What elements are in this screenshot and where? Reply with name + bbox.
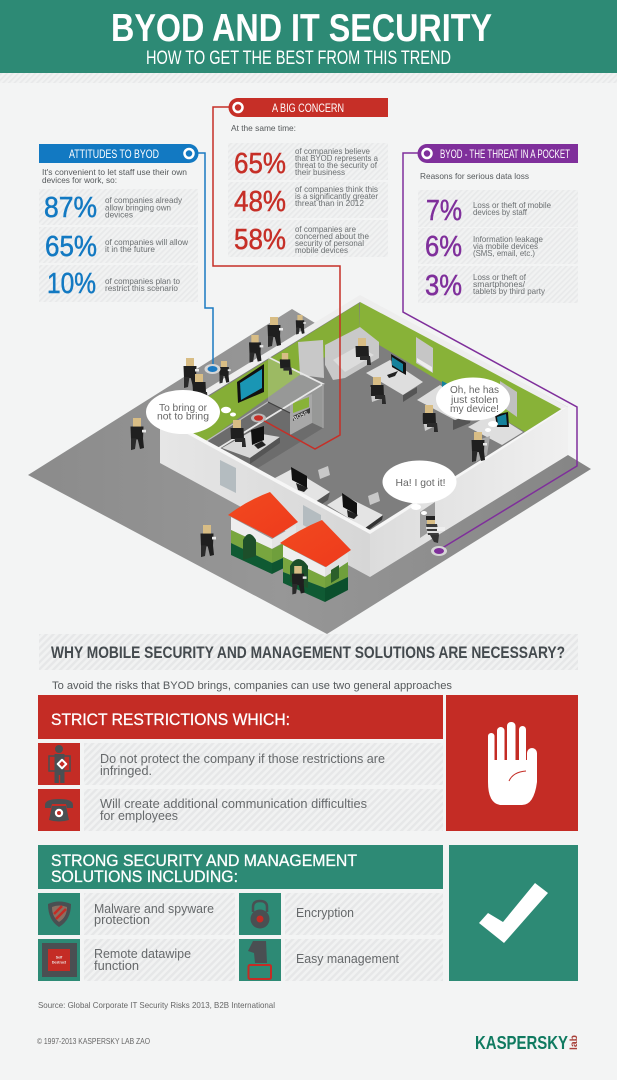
stat 48%: threat than in 2012 bbox=[295, 198, 364, 208]
speech bubble: got it: Ha! I got it! bbox=[396, 477, 446, 489]
stat 6% bbox=[418, 228, 578, 264]
solution: remote datawipe bbox=[38, 939, 235, 981]
stat 58%: concerned about the bbox=[295, 231, 369, 241]
restriction row 1: infringed. bbox=[100, 764, 152, 778]
icon: x-ray person bbox=[49, 745, 70, 783]
connector line: red bbox=[213, 107, 340, 449]
stat 3%: 3% bbox=[425, 270, 462, 302]
green back walls bbox=[187, 295, 568, 442]
icon: hand on tablet bbox=[248, 941, 271, 979]
red panel heading: A BIG CONCERN bbox=[272, 101, 344, 115]
wall TV screen bbox=[237, 364, 264, 403]
speech bubble: stolen device: just stolen bbox=[450, 394, 498, 406]
stat 7% bbox=[418, 190, 578, 227]
stat 6%: via mobile devices bbox=[473, 241, 538, 251]
office windows bbox=[416, 337, 517, 417]
stat 65%: that BYOD represents a bbox=[295, 153, 378, 163]
stat 58%: mobile devices bbox=[295, 245, 348, 255]
stat 10%: of companies plan to bbox=[105, 276, 180, 286]
stat 58% bbox=[228, 220, 388, 257]
stat 87% bbox=[39, 189, 198, 225]
stat 58%: 58% bbox=[234, 224, 286, 256]
icon: raised hand bbox=[488, 722, 537, 805]
stat 65%: it in the future bbox=[105, 244, 155, 254]
solution: remote datawipe: function bbox=[94, 959, 139, 973]
restrictions heading bbox=[38, 695, 443, 739]
office interior floor bbox=[160, 297, 568, 533]
purple panel intro: Reasons for serious data loss bbox=[420, 171, 529, 181]
icon: padlock bbox=[250, 901, 270, 928]
panel: attitudes to BYOD bbox=[39, 144, 198, 302]
solution: malware protection: protection bbox=[94, 913, 150, 927]
stat 87%: 87% bbox=[44, 192, 97, 224]
solution: encryption: Encryption bbox=[296, 906, 354, 920]
solution: malware protection: Malware and spyware bbox=[94, 902, 214, 916]
speech bubble: stolen device bbox=[436, 378, 510, 432]
blue panel heading: ATTITUDES TO BYOD bbox=[69, 147, 159, 161]
stat 6%: 6% bbox=[425, 231, 462, 263]
stat 6%: (SMS, email, etc.) bbox=[473, 248, 535, 258]
stat 87%: devices bbox=[105, 210, 133, 220]
stat 65%: their business bbox=[295, 167, 345, 177]
red panel intro: At the same time: bbox=[231, 123, 296, 133]
panel: threat in a pocket bbox=[418, 144, 578, 303]
stat 10% bbox=[39, 265, 198, 302]
icon: self destruct bbox=[42, 943, 77, 977]
blue panel intro: devices for work, so: bbox=[42, 175, 117, 185]
blue panel heading bbox=[39, 144, 198, 163]
stat 6%: Information leakage bbox=[473, 234, 543, 244]
solutions heading: STRONG SECURITY AND MANAGEMENT bbox=[51, 851, 357, 870]
stat 65%: threat to the security of bbox=[295, 160, 378, 170]
stat 3%: smartphones/ bbox=[473, 279, 526, 289]
stat 65%: 65% bbox=[234, 148, 286, 180]
subtitle: HOW TO GET THE BEST FROM THIS TREND bbox=[146, 47, 451, 69]
header banner bbox=[0, 0, 617, 83]
restrictions heading: STRICT RESTRICTIONS WHICH: bbox=[51, 710, 290, 729]
blue panel intro bbox=[42, 167, 187, 185]
isometric office scene bbox=[28, 295, 591, 634]
restriction row 2 bbox=[38, 789, 443, 831]
stat 7%: devices by staff bbox=[473, 207, 528, 217]
solution: remote datawipe: Remote datawipe bbox=[94, 947, 191, 961]
red panel heading bbox=[228, 98, 388, 117]
stat 3%: tablets by third party bbox=[473, 286, 546, 296]
people bbox=[130, 315, 487, 594]
stat 65%: 65% bbox=[45, 231, 97, 263]
stat 7%: Loss or theft of mobile bbox=[473, 200, 551, 210]
panel: a big concern bbox=[228, 98, 388, 257]
icon: telephone bbox=[45, 799, 73, 822]
logo: Kaspersky lab: lab bbox=[569, 1035, 580, 1050]
stat 58%: security of personal bbox=[295, 238, 364, 248]
icon: self destruct: Self bbox=[56, 956, 63, 960]
stat 48%: 48% bbox=[234, 186, 286, 218]
purple panel heading bbox=[418, 144, 578, 163]
right house bbox=[280, 520, 351, 602]
speech bubble: got it bbox=[382, 460, 456, 515]
stat 87%: allow bringing own bbox=[105, 202, 171, 212]
red location dot bbox=[251, 414, 266, 422]
stat 48%: is a significantly greater bbox=[295, 191, 378, 201]
source note: Source: Global Corporate IT Security Risks 2013, B2B International bbox=[38, 1000, 275, 1010]
icon: shield bbox=[48, 902, 71, 927]
solution: easy management bbox=[239, 939, 443, 981]
copyright: © 1997-2013 KASPERSKY LAB ZAO bbox=[37, 1037, 150, 1046]
restriction row 2: Will create additional communication difficulties bbox=[100, 797, 367, 811]
stat 65% bbox=[39, 227, 198, 263]
speech bubble: to bring or not: not to bring bbox=[157, 410, 209, 422]
section heading bbox=[39, 634, 578, 670]
stat 48% bbox=[228, 182, 388, 218]
houses bbox=[228, 492, 351, 602]
ground floor bbox=[28, 309, 591, 634]
speech bubble: to bring or not: To bring or bbox=[159, 402, 207, 414]
panel: strict restrictions bbox=[38, 695, 578, 831]
stat 10%: 10% bbox=[47, 268, 96, 300]
icon: self destruct: Destruct bbox=[52, 960, 67, 964]
blue panel intro: It's convenient to let staff use their own bbox=[42, 167, 187, 177]
title: BYOD AND IT SECURITY bbox=[111, 7, 492, 50]
restriction row 2: for employees bbox=[100, 809, 178, 823]
speech bubble: to bring or not bbox=[146, 390, 236, 434]
open door bbox=[298, 340, 324, 378]
stop hand tile bbox=[446, 695, 578, 831]
solution: encryption bbox=[239, 893, 443, 935]
icon: check mark bbox=[479, 883, 548, 943]
stat 87%: of companies already bbox=[105, 195, 183, 205]
stat 65%: of companies believe bbox=[295, 146, 370, 156]
panel: security and management solutions bbox=[38, 845, 578, 981]
stat 7%: 7% bbox=[426, 195, 462, 227]
restriction row 1: Do not protect the company if those restrictions are bbox=[100, 752, 385, 766]
stat 58%: of companies are bbox=[295, 224, 356, 234]
solution: malware protection bbox=[38, 893, 235, 935]
speech bubble: stolen device: my device! bbox=[450, 403, 499, 415]
left house bbox=[228, 492, 298, 574]
solutions heading: SOLUTIONS INCLUDING: bbox=[51, 867, 238, 886]
sofa bbox=[325, 327, 379, 380]
blue location dot bbox=[204, 364, 220, 374]
solutions heading bbox=[38, 845, 443, 889]
stat 10%: restrict this scenario bbox=[105, 283, 178, 293]
stat 3%: Loss or theft of bbox=[473, 272, 527, 282]
solution: easy management: Easy management bbox=[296, 952, 400, 966]
section intro: To avoid the risks that BYOD brings, companies can use two general approaches bbox=[52, 680, 452, 692]
stat 3% bbox=[418, 266, 578, 303]
purple location dot bbox=[431, 546, 447, 556]
stat 65% bbox=[228, 143, 388, 180]
thief in striped shirt bbox=[426, 516, 445, 543]
boss glass office bbox=[205, 357, 323, 468]
office desks bbox=[275, 354, 523, 531]
logo: Kaspersky lab: KASPERSKY bbox=[475, 1032, 569, 1053]
front outer walls bbox=[160, 407, 568, 577]
check mark tile bbox=[449, 845, 578, 981]
connector line: blue bbox=[198, 153, 220, 374]
stat 65%: of companies will allow bbox=[105, 237, 189, 247]
stat 48%: of companies think this bbox=[295, 184, 378, 194]
restriction row 1 bbox=[38, 743, 443, 785]
boss glass office: BOSS bbox=[292, 410, 309, 422]
speech bubble: stolen device: Oh, he has bbox=[450, 384, 499, 396]
connector line: purple bbox=[403, 153, 577, 556]
